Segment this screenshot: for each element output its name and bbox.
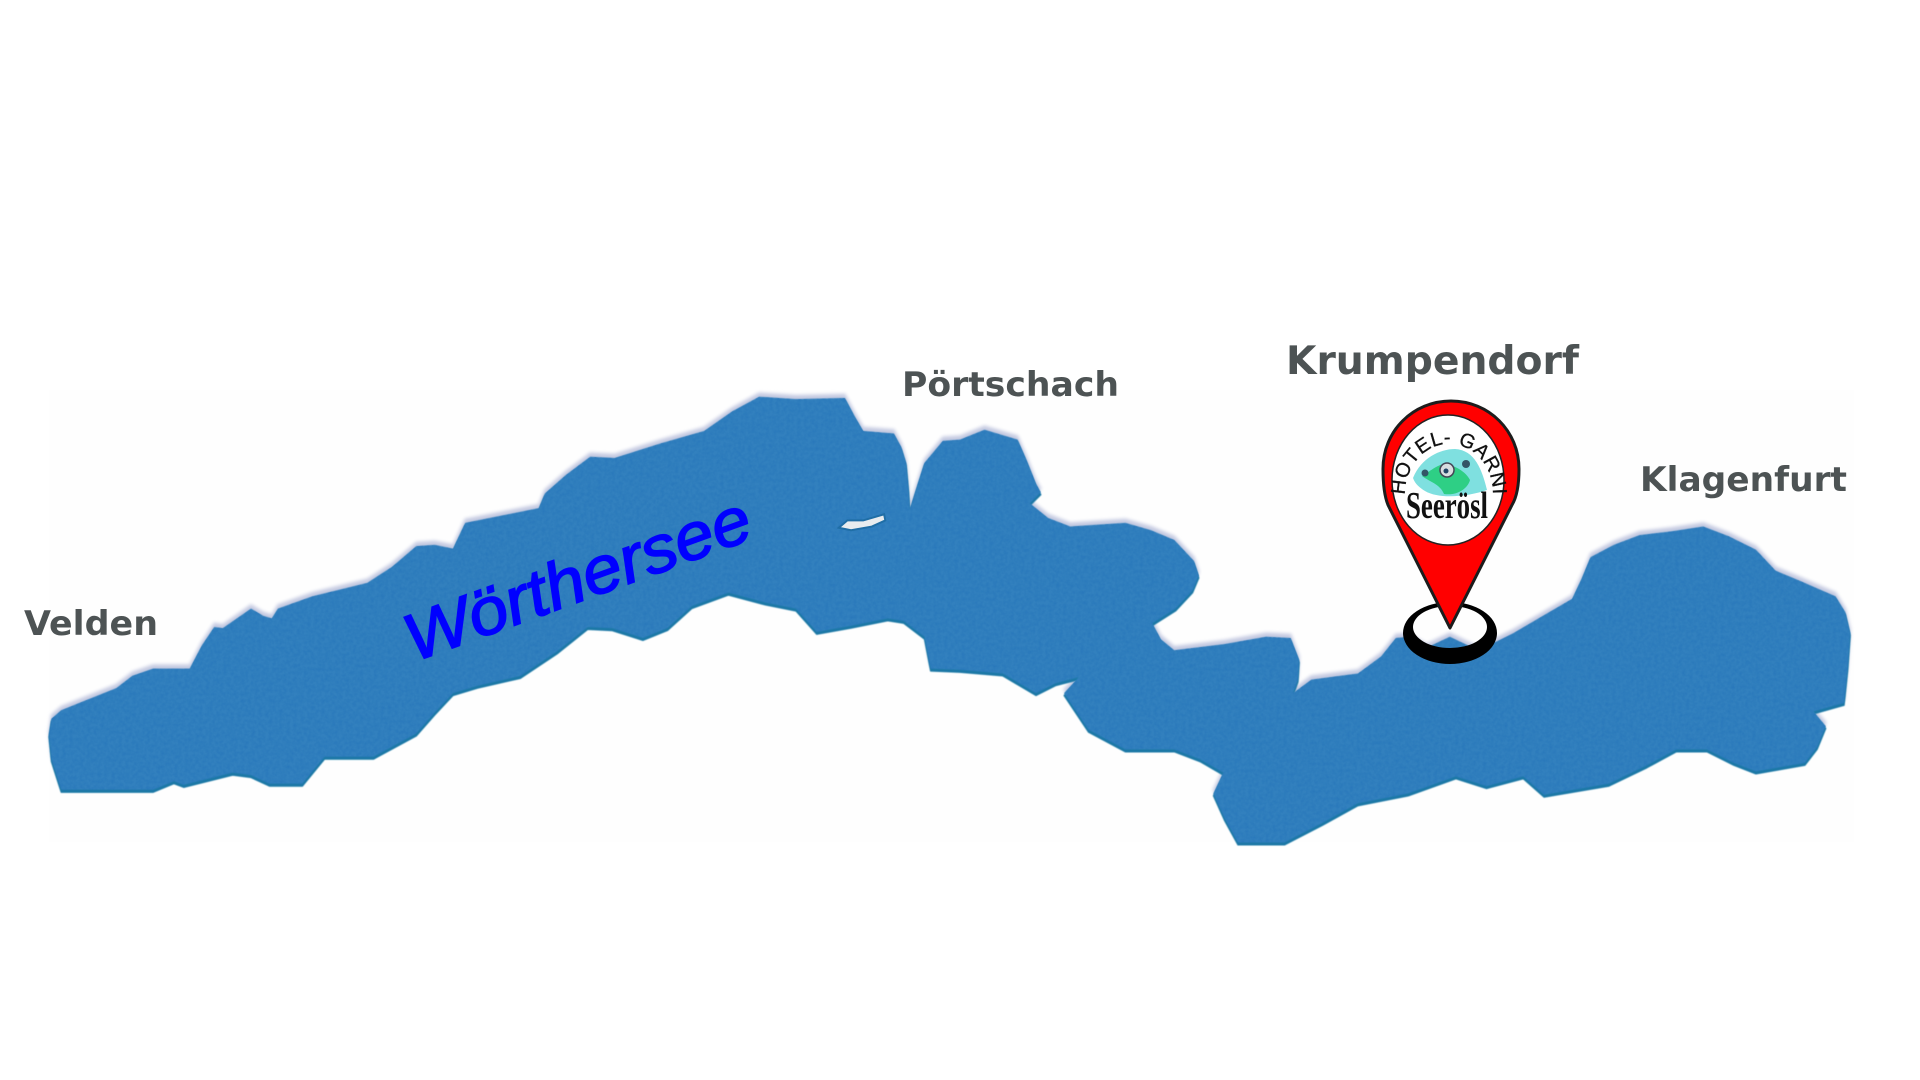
- label: Krumpendorf: Krumpendorf: [1286, 339, 1580, 384]
- logo flowers: [1422, 460, 1470, 477]
- label: Velden: Velden: [24, 604, 158, 644]
- logo lily pads: [1422, 464, 1470, 494]
- icon: location pin with hotel logo: [1382, 400, 1520, 664]
- label: Klagenfurt: Klagenfurt: [1640, 460, 1847, 500]
- pin base ring: [1403, 602, 1497, 664]
- pin body: [1383, 401, 1519, 628]
- label: lake name: Wörthersee: [393, 481, 761, 675]
- logo arc text: HOTEL- GARNI: [1390, 432, 1507, 494]
- label: Pörtschach: Pörtschach: [902, 365, 1119, 405]
- logo disc: [1392, 415, 1504, 545]
- lake Wörthersee: [49, 393, 1850, 845]
- island: [839, 514, 885, 530]
- background panel: [49, 390, 1854, 842]
- logo name: Seerösl: [1406, 485, 1488, 527]
- logo water: [1413, 449, 1487, 496]
